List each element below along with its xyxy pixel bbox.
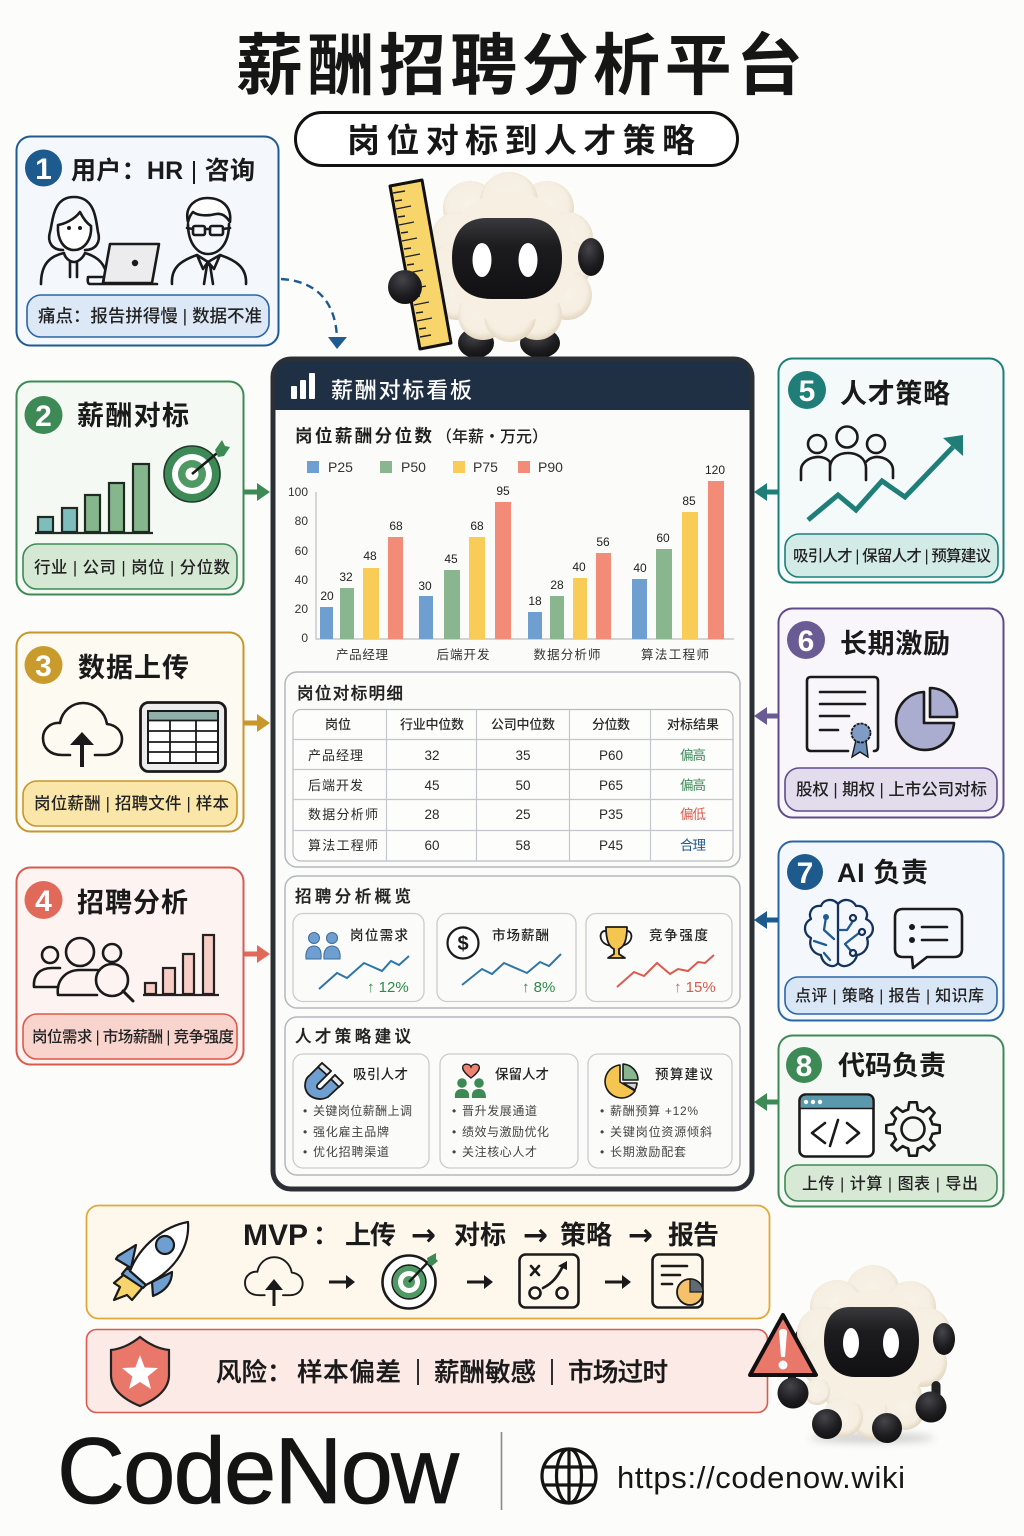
card: retain talent: 绩效与激励优化 [462, 1124, 549, 1139]
MVP steps text: 报告 [668, 1220, 719, 1250]
pill: benchmark tags: 行业 | 公司 | 岗位 | 分位数 [34, 557, 230, 577]
card: budget suggestion: • [600, 1125, 604, 1139]
arrow [329, 1275, 355, 1289]
chart legend [307, 459, 563, 475]
risk text: 市场过时 [568, 1359, 668, 1387]
bar chart: salary percentiles: 120 [705, 463, 725, 477]
bar chart: salary percentiles: 48 [363, 549, 377, 563]
panel 7: AI responsibility [778, 842, 1004, 1020]
pill: analysis tags: 岗位需求 | 市场薪酬 | 竞争强度 [32, 1027, 234, 1046]
card: retain talent: • [452, 1104, 456, 1118]
detail table: 58 [515, 838, 531, 853]
MVP steps text: 策略 [560, 1220, 612, 1250]
MVP steps text [243, 1218, 719, 1253]
card: attract talent: 吸引人才 [353, 1067, 408, 1082]
icon: target [164, 440, 230, 502]
arrow: panel 4 to dashboard [244, 945, 270, 963]
chart heading [295, 426, 548, 446]
bar chart: salary percentiles: 40 [572, 560, 586, 574]
bar chart: salary percentiles [288, 426, 734, 662]
chart legend: P25 [328, 459, 353, 475]
heading: AI responsibility: AI 负责 [837, 858, 928, 888]
detail table: 产品经理 [308, 748, 363, 763]
icon: tactic board [520, 1254, 578, 1308]
pain-point pill [27, 295, 269, 337]
chart heading: 岗位薪酬分位数 [295, 426, 432, 446]
badge 6: 6 [798, 625, 814, 658]
MVP steps text: → [523, 1218, 548, 1253]
badge 3: 3 [35, 650, 52, 683]
bar chart: salary percentiles: 后端开发 [436, 647, 490, 662]
arrow: dashboard to panel 5 [754, 483, 778, 501]
badge 2: 2 [35, 400, 52, 433]
strategy heading: 人才策略建议 [295, 1027, 412, 1046]
bar chart: salary percentiles: 数据分析师 [534, 647, 600, 662]
mascot: sheep with warning sign [750, 1265, 955, 1443]
heading: data upload: 数据上传 [78, 653, 189, 683]
badge 5: 5 [799, 375, 815, 408]
card: retain talent [440, 1054, 578, 1168]
card: retain talent: 保留人才 [495, 1067, 549, 1082]
detail table: 偏高 [680, 747, 706, 763]
risk text: 薪酬敏感 [434, 1359, 536, 1387]
bar chart: salary percentiles: 45 [444, 552, 458, 566]
card: position demand: 岗位需求 [350, 927, 408, 943]
card: retain talent: 晋升发展通道 [462, 1103, 537, 1118]
detail table: 60 [424, 838, 440, 853]
icon: team [801, 426, 893, 480]
icon: consultant man [172, 198, 246, 284]
detail table: 分位数 [592, 717, 630, 732]
badge 8: 8 [796, 1050, 812, 1083]
bar chart: salary percentiles: 20 [320, 589, 334, 603]
card: attract talent [293, 1054, 429, 1168]
detail table: 28 [424, 807, 440, 822]
bar chart: salary percentiles: 40 [633, 561, 647, 575]
card: competition: ↑ 15% [674, 979, 716, 996]
chart legend: P50 [401, 459, 426, 475]
detail table: 25 [515, 807, 531, 822]
divider [500, 1432, 502, 1510]
heading: benchmark: 薪酬对标 [77, 401, 189, 431]
subtitle pill: 岗位对标到人才策略 [347, 122, 695, 159]
badge 5 [788, 371, 826, 409]
pill: code tags [785, 1165, 997, 1201]
badge 2 [24, 396, 62, 434]
badge 3 [24, 646, 62, 684]
pill: data tags [23, 781, 237, 826]
icon: warning triangle [750, 1315, 816, 1375]
icon: laptop [88, 244, 159, 284]
MVP steps text: → [411, 1218, 436, 1253]
pill: benchmark tags [23, 544, 237, 589]
logo: CodeNow: CodeNow [57, 1418, 460, 1523]
bar chart: salary percentiles: 20 [295, 602, 308, 616]
MVP steps text: 上传 [345, 1220, 396, 1250]
detail table: 对标结果 [667, 717, 719, 732]
title: 薪酬招聘分析平台 [236, 29, 803, 104]
pill: incentive tags: 股权 | 期权 | 上市公司对标 [796, 780, 987, 799]
icon: upload cloud [245, 1257, 303, 1306]
card: budget suggestion: 关键岗位资源倾斜 [610, 1124, 712, 1139]
panel 8: code responsibility [778, 1036, 1004, 1206]
icon: people search [34, 938, 133, 1001]
card: budget suggestion: • [600, 1104, 604, 1118]
badge 6 [787, 621, 825, 659]
arrow: panel 3 to dashboard [244, 714, 270, 732]
bar chart: salary percentiles: 60 [295, 544, 308, 558]
detail table: P35 [599, 807, 623, 822]
pill: AI tags: 点评 | 策略 | 报告 | 知识库 [795, 987, 984, 1005]
card: budget suggestion: • [600, 1145, 604, 1159]
panel: risks [86, 1330, 768, 1412]
detail table: 行业中位数 [400, 717, 464, 732]
detail table [293, 710, 733, 861]
card: attract talent: 强化雇主品牌 [313, 1124, 389, 1139]
card: retain talent: • [452, 1125, 456, 1139]
icon: chat bubble [895, 909, 962, 968]
card: position demand: ↑ 12% [367, 979, 409, 996]
card: competition: 竞争强度 [649, 927, 708, 943]
MVP steps text: MVP [243, 1219, 308, 1252]
card: budget suggestion: 薪酬预算 +12% [610, 1103, 698, 1118]
arrow: dashboard to panel 8 [754, 1093, 778, 1111]
badge 4: 4 [35, 885, 52, 918]
detail table: 50 [515, 778, 531, 793]
heading: users: 用户：HR | 咨询 [71, 157, 255, 185]
bar chart: salary percentiles: 56 [596, 535, 610, 549]
arrow: dashboard to panel 6 [754, 707, 778, 725]
pill: code tags: 上传 | 计算 | 图表 | 导出 [802, 1174, 978, 1193]
overview heading: 招聘分析概览 [295, 887, 411, 906]
MVP steps text: 对标 [454, 1220, 506, 1250]
card: attract talent: 关键岗位薪酬上调 [313, 1103, 412, 1118]
detail table: 32 [424, 748, 440, 763]
card: retain talent: • [452, 1145, 456, 1159]
pill: analysis tags [23, 1014, 237, 1059]
bar chart: salary percentiles: 0 [301, 631, 308, 645]
icon: growth arrow [808, 435, 963, 520]
arrow: dashboard to panel 7 [754, 911, 778, 929]
icon: HR woman [41, 197, 106, 284]
dashboard header [275, 361, 750, 410]
card: attract talent: • [303, 1125, 307, 1139]
panel: talent strategy suggestions [285, 1017, 740, 1175]
card: position demand [293, 914, 424, 1002]
card: attract talent: • [303, 1145, 307, 1159]
dashboard header: 薪酬对标看板 [331, 378, 472, 403]
arrow [605, 1275, 631, 1289]
pill: talent tags: 吸引人才 | 保留人才 | 预算建议 [793, 546, 991, 565]
detail table: 数据分析师 [308, 807, 378, 822]
bar chart: salary percentiles: 68 [470, 519, 484, 533]
icon: gear [886, 1102, 940, 1156]
bar chart: salary percentiles: 产品经理 [336, 648, 388, 662]
badge 1: 1 [35, 153, 52, 186]
badge 4 [24, 881, 62, 919]
badge 7: 7 [797, 857, 813, 890]
badge 8 [786, 1047, 822, 1083]
icon: spreadsheet [140, 702, 226, 772]
MVP steps text: ： [313, 1220, 339, 1250]
heading: talent strategy: 人才策略 [840, 379, 950, 409]
card: budget suggestion: 预算建议 [655, 1066, 714, 1082]
bar chart: salary percentiles: 68 [389, 519, 403, 533]
detail table: P45 [599, 838, 623, 853]
card: market salary: $ [457, 933, 469, 955]
detail table: 合理 [680, 838, 706, 853]
detail table: 偏高 [680, 777, 706, 793]
heading: code responsibility: 代码负责 [838, 1051, 946, 1081]
mascot: sheep with ruler [388, 172, 604, 358]
panel: MVP roadmap [86, 1206, 770, 1318]
bar chart: salary percentiles: 80 [295, 514, 308, 528]
icon: rising bars [143, 935, 219, 995]
subtitle pill [296, 112, 738, 166]
icon: bar chart [35, 464, 153, 533]
panel: benchmark detail table [285, 672, 740, 867]
bar chart: salary percentiles: 95 [496, 484, 510, 498]
pill: talent tags [785, 534, 998, 577]
panel 3: data upload [16, 632, 244, 832]
bar chart: salary percentiles: 算法工程师 [641, 647, 709, 662]
risk text [216, 1359, 668, 1387]
panel 2: benchmark [16, 382, 244, 594]
badge 7 [787, 854, 823, 890]
card: market salary: ↑ 8% [522, 979, 555, 996]
detail table: 算法工程师 [308, 838, 378, 853]
detail table: P60 [599, 748, 623, 763]
card: competition [586, 914, 732, 1002]
heading: recruiting analysis: 招聘分析 [77, 888, 188, 918]
icon: cloud upload [43, 703, 122, 767]
chart legend: P75 [473, 459, 498, 475]
card: market salary: 市场薪酬 [492, 927, 549, 943]
detail table: 岗位 [325, 717, 351, 732]
risk text: 样本偏差 [297, 1359, 401, 1387]
website url: https://codenow.wiki [617, 1460, 905, 1495]
bar chart: salary percentiles: 100 [288, 485, 308, 499]
dashed arrow: users to dashboard [281, 279, 347, 349]
table heading: 岗位对标明细 [297, 683, 403, 703]
pill: data tags: 岗位薪酬 | 招聘文件 | 样本 [34, 793, 229, 813]
card: budget suggestion [588, 1054, 732, 1168]
bar chart: salary percentiles: 85 [682, 494, 696, 508]
detail table: 45 [424, 778, 440, 793]
icon: brain [805, 900, 873, 966]
bar chart: salary percentiles: 32 [339, 570, 353, 584]
icon: report [652, 1254, 703, 1308]
bar chart: salary percentiles: 30 [418, 579, 432, 593]
arrow [467, 1275, 493, 1289]
icon: target [382, 1253, 438, 1308]
icon: equity pie [896, 688, 957, 750]
bar chart: salary percentiles: 18 [528, 594, 542, 608]
bar chart: salary percentiles: 28 [550, 578, 564, 592]
icon: certificate [807, 677, 878, 757]
icon: rocket [114, 1222, 188, 1300]
dashboard panel [273, 359, 752, 1189]
chart legend: P90 [538, 459, 563, 475]
MVP steps text: → [628, 1218, 653, 1253]
icon: shield [111, 1337, 169, 1406]
detail table: 35 [515, 748, 531, 763]
chart heading: （年薪・万元） [436, 428, 548, 446]
bar chart: salary percentiles: 60 [656, 531, 670, 545]
card: budget suggestion: 长期激励配套 [610, 1145, 686, 1159]
detail table: P65 [599, 778, 623, 793]
detail table: 偏低 [680, 807, 706, 822]
pain-point pill: 痛点：报告拼得慢 | 数据不准 [38, 306, 262, 326]
badge 1 [25, 150, 62, 186]
card: attract talent: 优化招聘渠道 [313, 1145, 389, 1159]
bar chart: salary percentiles: 40 [295, 573, 308, 587]
panel 6: long-term incentive [778, 608, 1004, 818]
pill: incentive tags [785, 768, 997, 811]
heading: long-term incentive: 长期激励 [840, 629, 950, 659]
card: market salary [437, 914, 576, 1002]
detail table: 公司中位数 [491, 717, 555, 732]
panel 4: recruiting analysis [16, 868, 244, 1064]
icon: code window [800, 1094, 874, 1156]
panel 5: talent strategy [778, 358, 1004, 582]
arrow: panel 2 to dashboard [244, 483, 270, 501]
detail table: 后端开发 [308, 778, 363, 793]
panel: recruiting overview [285, 876, 740, 1008]
pill: AI tags [785, 977, 997, 1014]
panel 1: users [16, 136, 278, 346]
risk text: 风险： [216, 1359, 293, 1387]
card: retain talent: 关注核心人才 [462, 1144, 537, 1159]
card: attract talent: • [303, 1104, 307, 1118]
icon: globe [542, 1449, 596, 1503]
